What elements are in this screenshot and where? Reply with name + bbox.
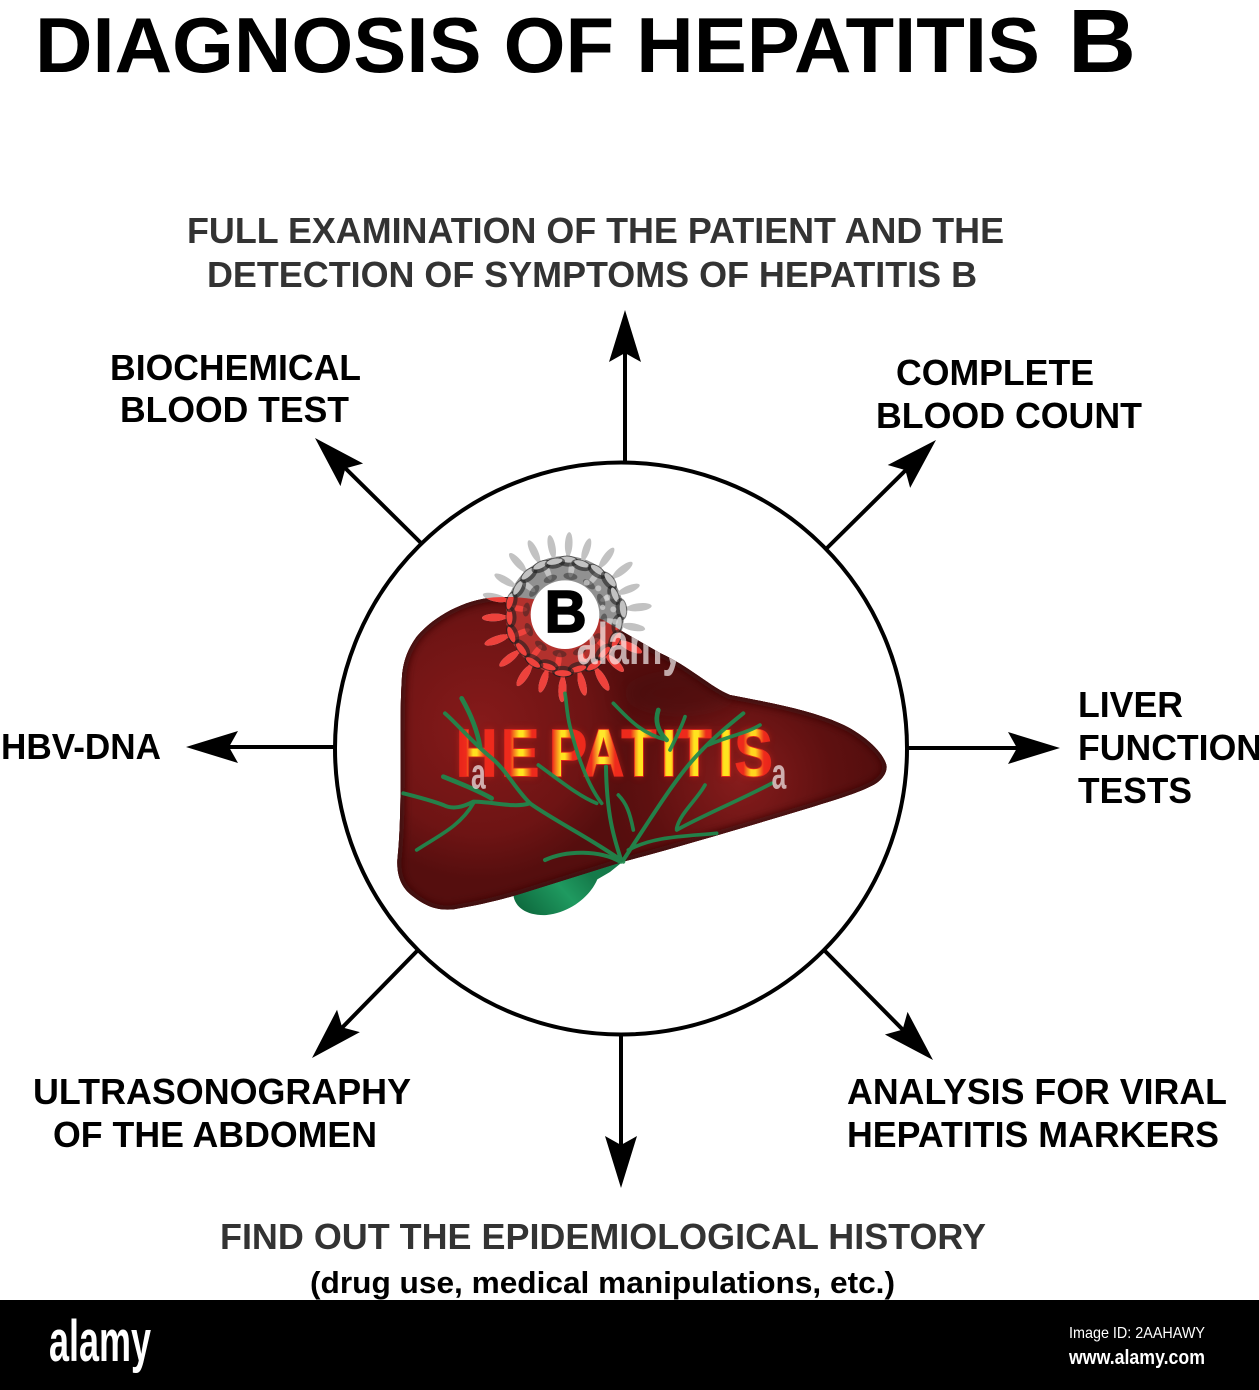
label: ultrasonography of the abdomen: ULTRASONOGRAPHY [33,1071,411,1112]
arrow: bottom [605,1034,637,1188]
label: complete blood count: BLOOD COUNT [876,395,1142,436]
label: epidemiological history [220,1216,986,1300]
label: liver function tests: LIVER [1078,684,1183,725]
icon: virus surface dots [584,580,618,625]
label: ultrasonography of the abdomen: OF THE ABDOMEN [53,1114,377,1155]
label: analysis for viral hepatitis markers: ANALYSIS FOR VIRAL [847,1071,1227,1112]
bile ducts [403,693,772,862]
central circle [335,462,907,1034]
label: complete blood count: COMPLETE [896,352,1094,393]
icon: gallbladder [513,858,621,915]
virus B badge: B [545,578,587,645]
label: biochemical blood test [110,347,361,430]
label: full examination [187,210,1004,295]
hepatitis word glow: HEPATITIS [456,717,773,791]
arrow: upper right [826,429,947,549]
label: full examination: DETECTION OF SYMPTOMS OF HEPATITIS B [207,254,977,295]
footer bar [0,1300,1259,1390]
label: complete blood count [876,352,1142,436]
label: liver function tests: TESTS [1078,770,1192,811]
title: DIAGNOSIS OF HEPATITIS [35,1,1040,89]
label: epidemiological history: FIND OUT THE EPIDEMIOLOGICAL HISTORY [220,1216,986,1257]
label: epidemiological history: (drug use, medical manipulations, etc.) [310,1265,895,1300]
arrow: upper left [304,427,421,543]
arrow: lower left [301,950,418,1069]
label: liver function tests [1078,684,1259,811]
label: analysis for viral hepatitis markers: HEPATITIS MARKERS [847,1114,1219,1155]
icon: hepatitis B virus red part over liver [482,597,642,702]
hepatitis word: HEPATITIS [456,717,773,791]
label: biochemical blood test: BIOCHEMICAL [110,347,361,388]
alamy logo: alamy [49,1309,151,1374]
watermark: alamy [577,612,684,677]
arrow: left [186,731,335,763]
label: biochemical blood test: BLOOD TEST [120,389,349,430]
watermark [472,622,786,789]
icon: hepatitis B virus grey [480,532,653,702]
virus B badge [531,578,599,649]
label: analysis for viral hepatitis markers [847,1071,1227,1155]
label: liver function tests: FUNCTION [1078,727,1259,768]
watermark: a [471,749,486,798]
label: HBV-DNA: HBV-DNA [1,726,161,767]
website: www.alamy.com [1068,1347,1205,1369]
arrow: lower right [824,950,944,1071]
arrow: right [907,732,1060,764]
label: full examination: FULL EXAMINATION OF THE PATIENT AND THE [187,210,1004,251]
liver illustration [380,532,900,920]
image id: Image ID: 2AAHAWY [1069,1325,1205,1342]
watermark: a [772,749,787,798]
arrow: top [609,310,641,462]
liver body [397,597,887,910]
label: ultrasonography of the abdomen [33,1071,411,1155]
